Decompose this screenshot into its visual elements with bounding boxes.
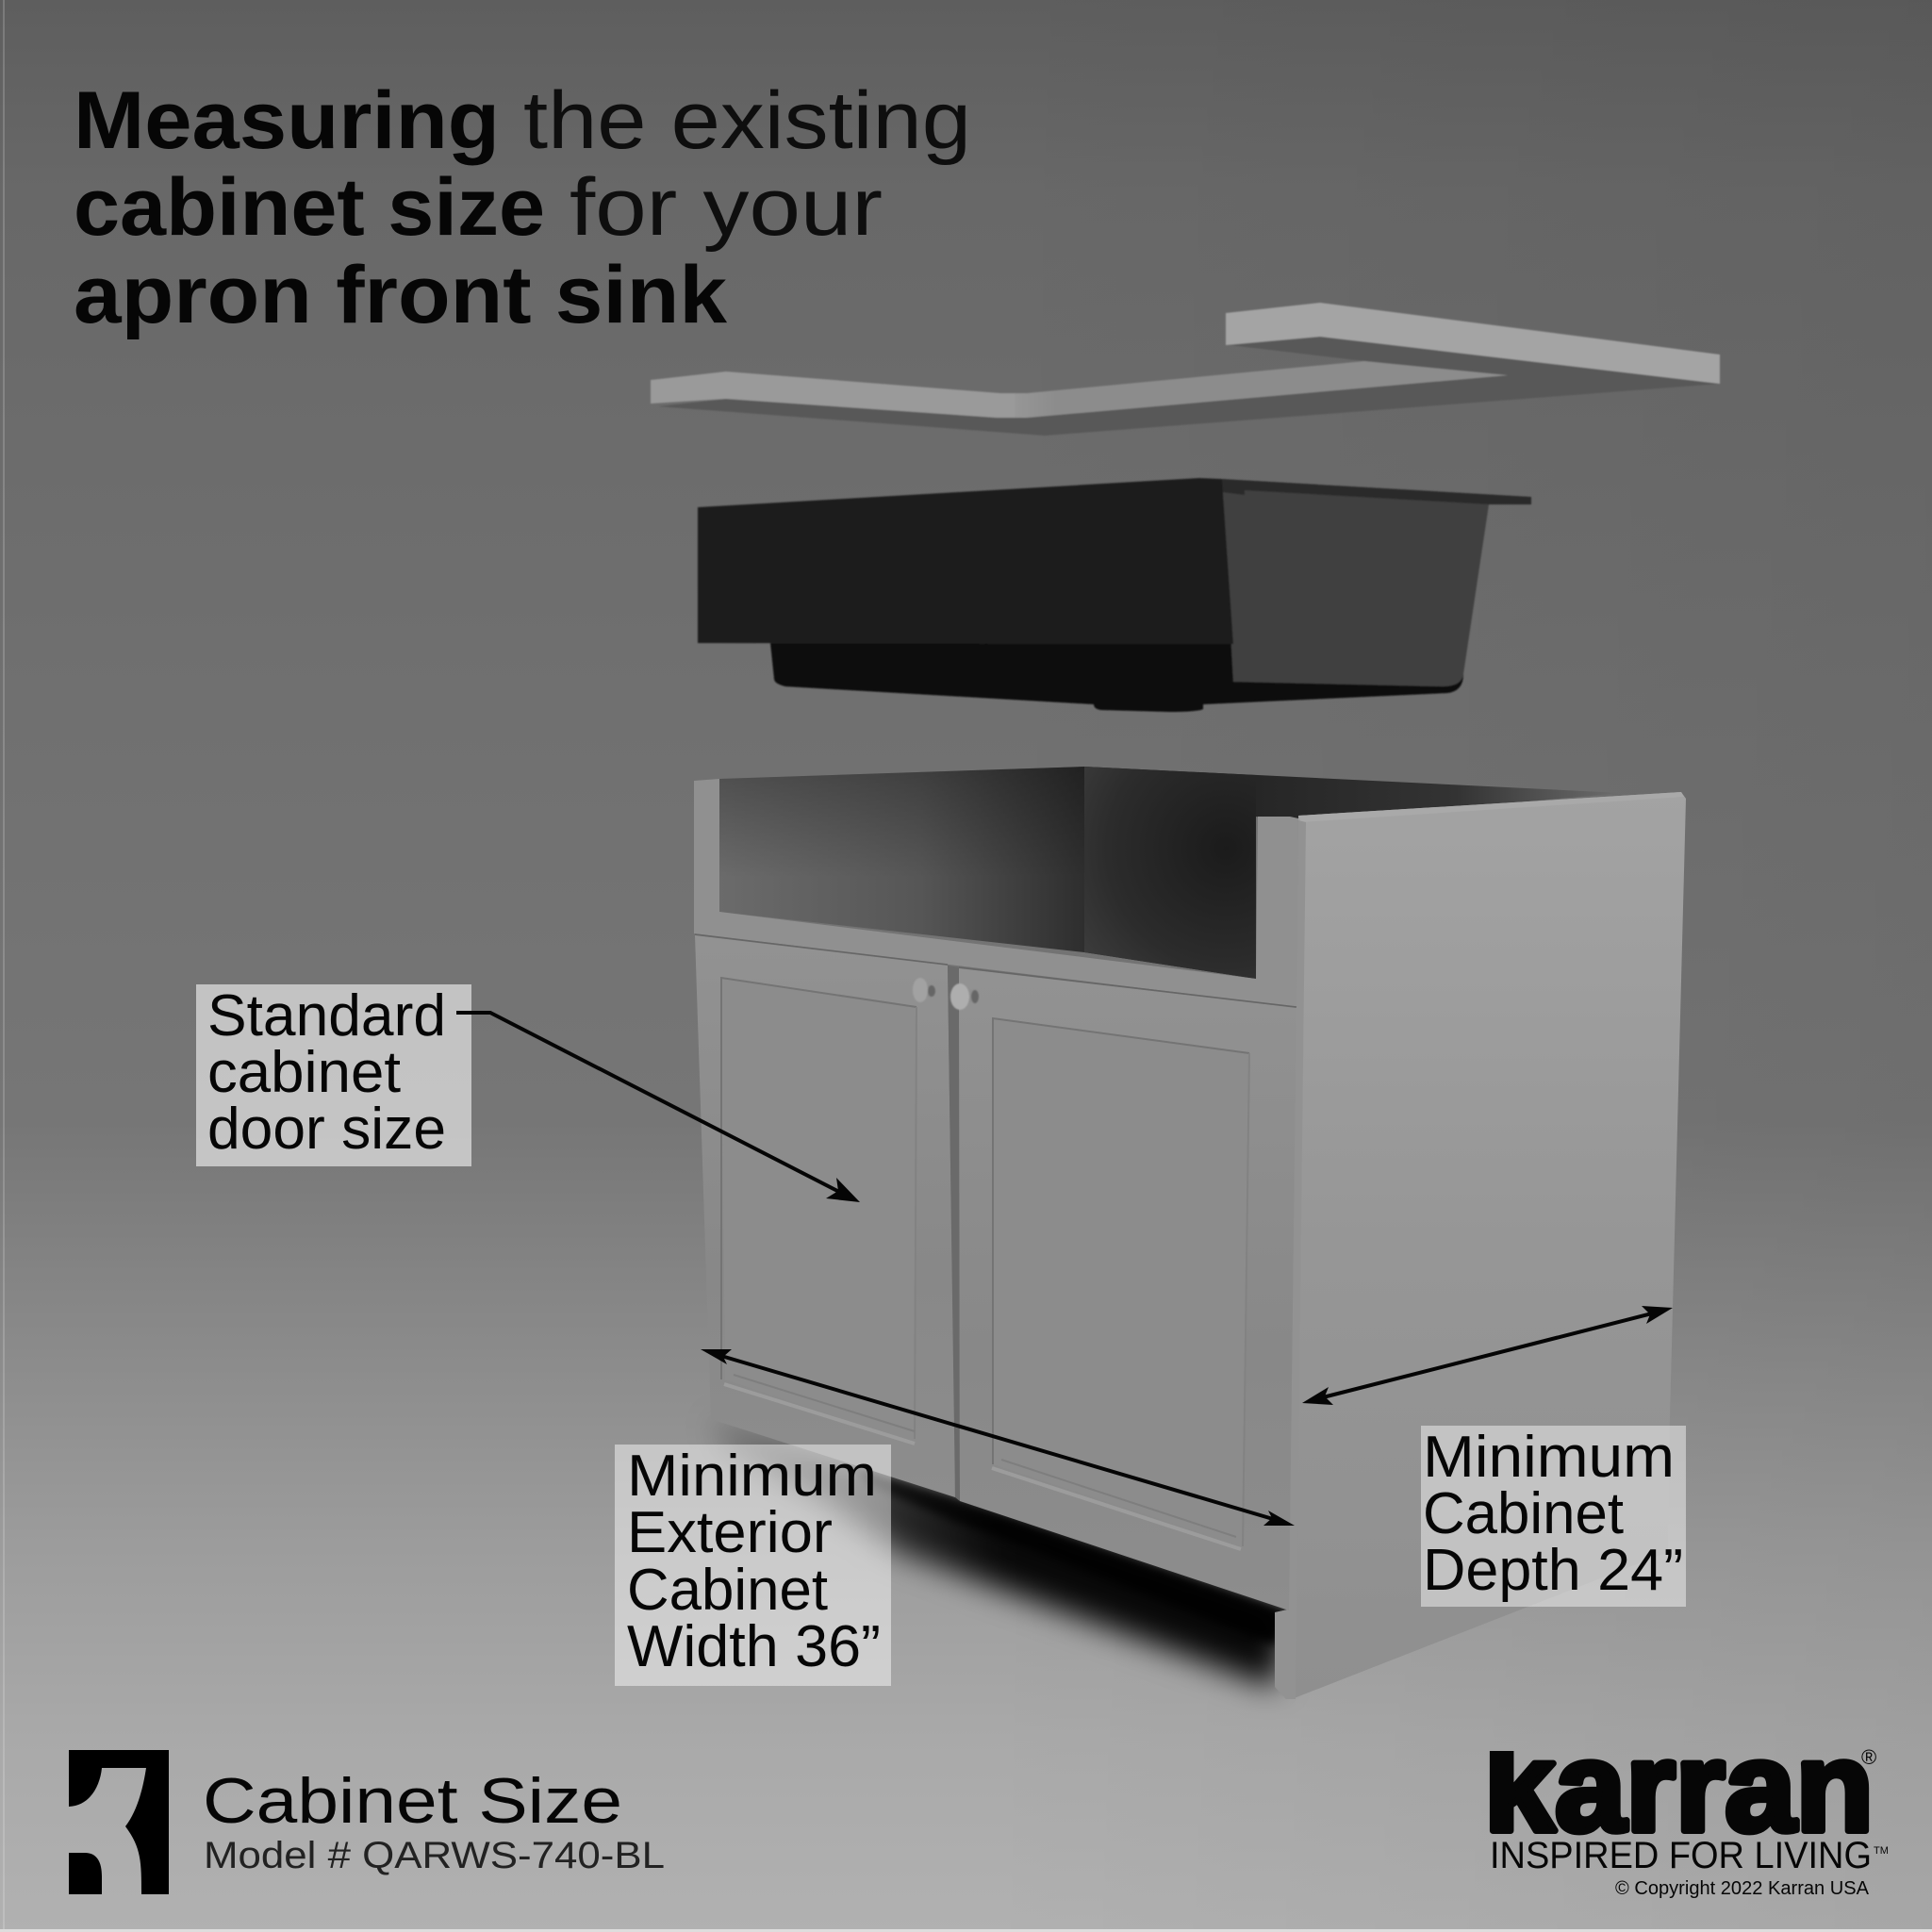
arrow: cabinet width: [701, 1349, 1295, 1526]
Karran logo: [1490, 1750, 1888, 1898]
label: minimum cabinet depth: Cabinet: [1423, 1481, 1624, 1546]
label: minimum cabinet depth: Depth 24”: [1423, 1538, 1683, 1603]
sink side face: [1222, 479, 1531, 686]
cabinet side panel: [1275, 792, 1686, 1699]
left door panel: [721, 978, 916, 1443]
section caption: Model # QARWS-740-BL: [204, 1835, 665, 1876]
Karran logo: TM: [1874, 1845, 1889, 1857]
arrow: cabinet depth: [1302, 1306, 1673, 1405]
Karran logo: © Copyright 2022 Karran USA: [1615, 1878, 1870, 1899]
section caption: Cabinet Size: [203, 1765, 622, 1837]
left door: [695, 934, 955, 1497]
title: apron front sink: [74, 250, 727, 340]
title: [74, 75, 971, 340]
icon: Karran K mark: [69, 1750, 169, 1894]
label: standard door size: [196, 983, 471, 1166]
sink apron face: [698, 478, 1233, 644]
door knobs: [913, 978, 979, 1010]
label: minimum exterior cabinet width: [615, 1444, 891, 1686]
label: standard door size: door size: [207, 1097, 446, 1162]
arrow: door size pointer: [456, 1013, 860, 1202]
countertop underside: [658, 337, 1720, 436]
door gap: [948, 966, 960, 1501]
label: standard door size: cabinet: [207, 1040, 401, 1105]
Karran logo: INSPIRED FOR LIVING: [1490, 1835, 1872, 1876]
label: minimum cabinet depth: [1421, 1425, 1686, 1607]
Karran logo: karran: [1484, 1716, 1874, 1858]
label: minimum exterior cabinet width: Exterior: [627, 1500, 833, 1565]
side panel front edge: [1275, 820, 1306, 1699]
right door panel: [993, 1018, 1249, 1546]
floor shadow: [711, 1419, 1289, 1688]
countertop: [651, 303, 1720, 436]
title: for your: [570, 162, 883, 253]
sink bowl bottom: [770, 643, 1463, 712]
sink: [698, 478, 1531, 712]
label: standard door size: Standard: [207, 983, 446, 1049]
label: minimum exterior cabinet width: Width 36”: [627, 1614, 881, 1679]
cabinet interior: [719, 767, 1622, 979]
label: minimum exterior cabinet width: Cabinet: [627, 1558, 828, 1623]
title: Measuring: [74, 75, 500, 166]
countertop front strip: [1013, 361, 1508, 418]
section caption: [203, 1765, 665, 1876]
cabinet: [694, 767, 1686, 1699]
cabinet top rail: [694, 779, 1298, 1007]
title: the existing: [523, 75, 971, 166]
Karran logo: ®: [1861, 1745, 1876, 1769]
countertop right return: [1226, 303, 1720, 384]
side panel top edge: [1298, 792, 1684, 822]
title: cabinet size: [74, 162, 545, 253]
label: minimum cabinet depth: Minimum: [1423, 1425, 1675, 1490]
countertop left return: [651, 372, 1015, 418]
sink rim: [1222, 479, 1531, 504]
label: minimum exterior cabinet width: Minimum: [627, 1444, 877, 1509]
right door: [959, 967, 1296, 1610]
